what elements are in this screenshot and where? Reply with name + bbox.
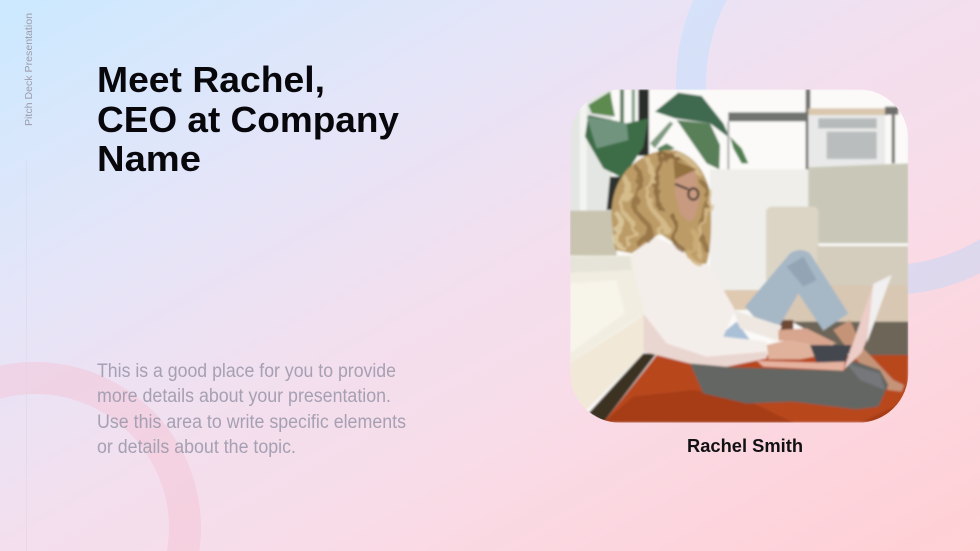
body text: more details about your presentation.: [97, 386, 391, 407]
title: Name: [97, 138, 201, 179]
body text: Use this area to write specific elements: [97, 412, 406, 433]
photo caption: name: Rachel Smith: [687, 436, 803, 456]
body text: or details about the topic.: [97, 437, 296, 458]
title: [97, 59, 399, 179]
vertical side label: Pitch Deck Presentation: [23, 13, 35, 126]
body text: This is a good place for you to provide: [97, 361, 396, 382]
photo: woman working on a laptop on the floor: [570, 89, 908, 423]
decorative ring: top right: [676, 0, 980, 295]
title: CEO at Company: [97, 99, 399, 140]
decorative ring: bottom left: [0, 362, 201, 551]
body text: [97, 361, 406, 458]
title: Meet Rachel,: [97, 59, 325, 100]
